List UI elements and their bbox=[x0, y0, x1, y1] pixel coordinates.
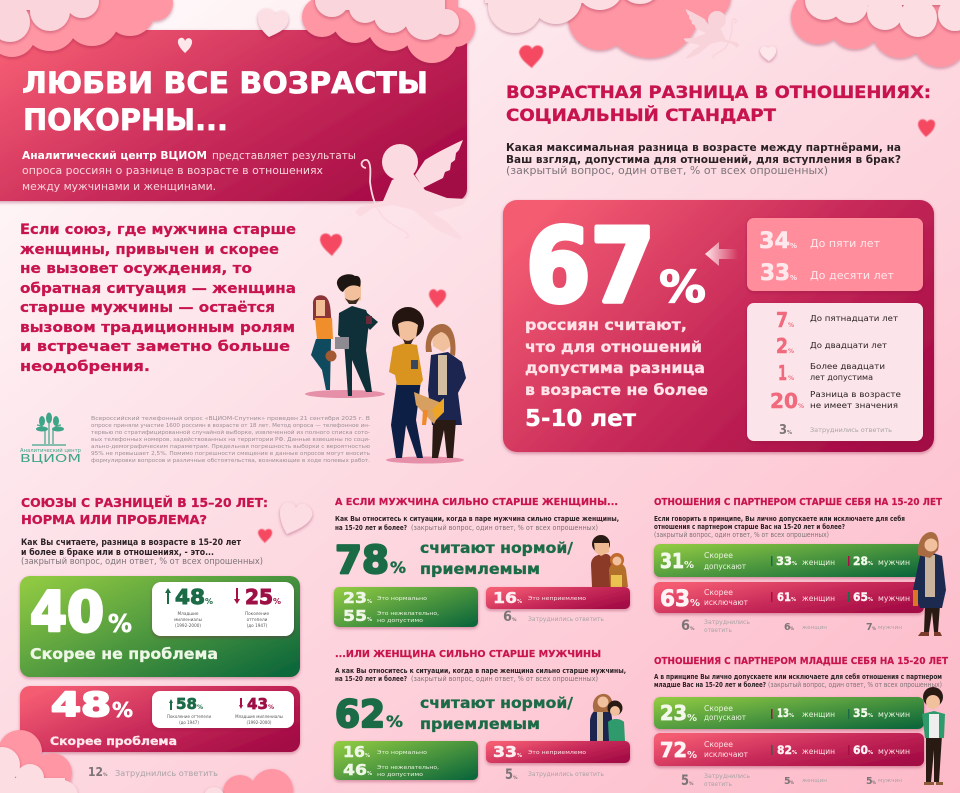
heading: age gap bbox=[506, 83, 931, 125]
panel: acceptable: Это нормально bbox=[377, 596, 428, 602]
illustration: couple bbox=[591, 535, 628, 587]
panel: problem: Скорее проблема bbox=[50, 734, 177, 748]
panel: acceptable: Это нежелательно, bbox=[377, 765, 439, 771]
panel: unacceptable: % bbox=[517, 753, 522, 759]
question bbox=[654, 515, 905, 539]
cloud: top centre bbox=[302, 0, 475, 63]
panel: acceptable: % bbox=[367, 599, 372, 605]
section: woman much older bbox=[334, 649, 630, 783]
box: other answers: лет допустима bbox=[810, 373, 873, 382]
logo: ВЦИОМ bbox=[20, 412, 81, 465]
bar: allow: % bbox=[789, 713, 794, 719]
bar: exclude bbox=[654, 582, 924, 613]
bar: allow: допускают bbox=[704, 562, 747, 571]
panel: acceptable: % bbox=[367, 617, 372, 623]
bar: exclude: % bbox=[868, 750, 873, 756]
row: unsure: 6 bbox=[681, 618, 690, 634]
heading: unions: СОЮЗЫ С РАЗНИЦЕЙ В 15–20 ЛЕТ: bbox=[21, 495, 268, 510]
question: Как Вы относитесь к ситуации, когда в паре мужчина сильно старше женщины, bbox=[335, 515, 619, 523]
panel: acceptable: но допустимо bbox=[377, 618, 424, 624]
callout: generations: % bbox=[197, 704, 203, 711]
big number 62: % bbox=[386, 712, 403, 731]
intro text bbox=[22, 149, 356, 193]
callout: generations: 48 bbox=[175, 585, 205, 609]
row: unsure: 6 bbox=[784, 622, 791, 633]
row: unsure: % bbox=[690, 626, 695, 632]
answer: unsure: 6 bbox=[503, 609, 512, 625]
statement: считают нормой/ bbox=[420, 694, 574, 712]
heart: red right bbox=[918, 119, 935, 137]
question: Если говорить в принципе, Вы лично допускаете или исключаете для себя bbox=[654, 515, 905, 523]
footnote text: тервью по стратифицированной случайной выборке, извлеченной из полного списка сото- bbox=[91, 429, 370, 436]
cloud: bottom left bbox=[0, 730, 72, 793]
cloud: far right bbox=[791, 0, 960, 67]
panel: not a problem bbox=[20, 576, 300, 677]
panel: problem: % bbox=[112, 698, 133, 722]
box: five and ten years: % bbox=[790, 242, 797, 250]
box: other answers: % bbox=[787, 430, 792, 436]
panel statement: что для отношений bbox=[525, 338, 702, 356]
statement text: неодобрения. bbox=[20, 359, 150, 375]
question: unions: и более в браке или в отношениях, - это... bbox=[21, 547, 214, 558]
heart: small white bbox=[178, 38, 192, 53]
row: unsure: % bbox=[689, 781, 694, 787]
statement bbox=[420, 694, 574, 733]
bar: exclude: 61 bbox=[777, 590, 791, 604]
bar: allow: женщин bbox=[802, 558, 835, 567]
illustration: woman bbox=[913, 532, 946, 636]
box: other answers: 1 bbox=[778, 361, 787, 385]
arrow bbox=[705, 242, 738, 266]
bar: allow: мужчин bbox=[878, 710, 910, 719]
panel: acceptable: 23 bbox=[343, 589, 367, 607]
box: other answers: % bbox=[788, 348, 794, 355]
bar: allow: 35 bbox=[853, 706, 868, 720]
statement text: женщины, привычен и скорее bbox=[20, 242, 279, 258]
bar: exclude: 72 bbox=[660, 738, 687, 762]
bar: exclude: % bbox=[690, 598, 700, 609]
row: unsure: % bbox=[872, 626, 876, 631]
intro text: представляет результаты bbox=[212, 149, 356, 162]
callout: generations: Младшие bbox=[178, 611, 199, 616]
answer: unsure 12: Затруднились ответить bbox=[115, 769, 218, 778]
row: unsure: 7 bbox=[866, 622, 873, 633]
box: other answers: 3 bbox=[779, 423, 787, 438]
illustration: first couple bbox=[305, 274, 385, 398]
box: other answers: До пятнадцати лет bbox=[810, 314, 898, 323]
question bbox=[654, 673, 942, 689]
bar: exclude bbox=[654, 733, 924, 766]
heart: pale top bbox=[258, 9, 288, 37]
illustration: second couple bbox=[386, 307, 466, 464]
box: five and ten years bbox=[747, 218, 923, 291]
answer: unsure: Затруднились ответить bbox=[528, 616, 604, 623]
bar: allow: % bbox=[687, 713, 697, 724]
question: (закрытый вопрос, один ответ, % от всех опрошенных) bbox=[411, 675, 598, 683]
bar: allow: 28 bbox=[853, 554, 868, 568]
intro text: Аналитический центр ВЦИОМ bbox=[22, 149, 207, 162]
panel: problem: 48 bbox=[51, 685, 111, 724]
row: unsure: мужчин bbox=[878, 625, 902, 631]
panel: unacceptable: 33 bbox=[493, 743, 517, 761]
cloud: bottom middle pale bbox=[204, 787, 224, 793]
cloud: top left pale bbox=[0, 0, 99, 42]
callout: generations: 58 bbox=[176, 695, 197, 713]
callout: generations: оттепели bbox=[247, 617, 268, 622]
bar: exclude: 65 bbox=[853, 590, 868, 604]
row: unsure bbox=[681, 618, 902, 634]
bar: allow: мужчин bbox=[878, 558, 910, 567]
box: other answers: % bbox=[788, 322, 794, 329]
callout: generations: % bbox=[205, 597, 213, 606]
intro text: опроса россиян о разнице в возрасте в отношениях bbox=[22, 164, 323, 177]
callout: generations: (до 1947) bbox=[179, 720, 199, 725]
box: other answers bbox=[747, 303, 923, 441]
box: five and ten years: 34 bbox=[759, 229, 790, 254]
statement text: не вызовет осуждения, то bbox=[20, 261, 252, 277]
title bbox=[22, 66, 428, 137]
heart: red near people bbox=[320, 234, 342, 256]
bar: allow: % bbox=[868, 561, 873, 567]
heading: unions bbox=[21, 495, 268, 527]
cloud: top left bbox=[0, 0, 173, 57]
bar: exclude: Скорее bbox=[704, 588, 733, 597]
question: unions bbox=[21, 538, 263, 567]
question bbox=[335, 667, 626, 683]
big number 62: 62 bbox=[335, 693, 385, 736]
bar: allow: Скорее bbox=[704, 704, 733, 713]
question: А как Вы относитесь к ситуации, когда в паре женщина сильно старше мужчины, bbox=[335, 667, 626, 675]
heart: large pale lower left bbox=[280, 502, 312, 534]
box: other answers: не имеет значения bbox=[810, 401, 898, 410]
logo: ВЦИОМ: Аналитический центр bbox=[20, 447, 81, 454]
bar: exclude: женщин bbox=[802, 747, 835, 756]
panel: acceptable: 55 bbox=[343, 607, 367, 625]
percent sign: % bbox=[659, 262, 706, 313]
bar: exclude: % bbox=[791, 597, 796, 603]
row: unsure: Затруднились bbox=[704, 772, 750, 780]
callout: generations bbox=[152, 582, 294, 636]
statement text: и встречает заметно больше bbox=[20, 339, 290, 355]
bar: allow: допускают bbox=[704, 713, 747, 722]
bar: allow: женщин bbox=[802, 710, 835, 719]
answer: unsure 12 bbox=[88, 765, 218, 779]
cupid: on banner bbox=[355, 140, 467, 240]
heading: age gap: СОЦИАЛЬНЫЙ СТАНДАРТ bbox=[506, 106, 777, 125]
question: age gap: Какая максимальная разница в возрасте между партнёрами, на bbox=[506, 142, 901, 154]
intro text: между мужчинами и женщинами. bbox=[22, 180, 216, 193]
row: unsure bbox=[681, 772, 902, 789]
callout: generations: % bbox=[273, 597, 281, 606]
row: unsure: Затруднились bbox=[704, 618, 750, 626]
panel: acceptable: % bbox=[367, 771, 372, 777]
question: age gap: Ваш взгляд, допустима для отношений, для вступления в брак? bbox=[506, 154, 901, 166]
answer: unsure: % bbox=[513, 775, 518, 781]
box: other answers: 2 bbox=[776, 334, 788, 358]
illustration: couple bbox=[590, 694, 625, 741]
box: other answers: % bbox=[788, 375, 794, 382]
bar: allow: 31 bbox=[660, 549, 684, 573]
panel: unacceptable: Это неприемлемо bbox=[528, 596, 587, 602]
question: (закрытый вопрос, один ответ, % от всех опрошенных) bbox=[411, 524, 598, 532]
callout: generations: Поколение оттепели bbox=[167, 714, 211, 719]
bar: allow: Скорее bbox=[704, 551, 733, 560]
panel statement: 5-10 лет bbox=[525, 406, 637, 432]
cloud: top middle pale bbox=[485, 0, 662, 33]
question: unions: Как Вы считаете, разница в возрасте в 15-20 лет bbox=[21, 538, 241, 548]
bar: allow: % bbox=[792, 561, 797, 567]
panel statement: в возрасте не более bbox=[525, 381, 708, 399]
callout: generations: Младшие миллениалы bbox=[235, 714, 283, 719]
question: отношения с партнером старше Вас на 15-20 лет и более? bbox=[654, 523, 845, 531]
box: other answers: 7 bbox=[776, 308, 788, 332]
panel statement bbox=[525, 316, 708, 432]
panel: acceptable bbox=[334, 587, 478, 627]
box: other answers: Затруднились ответить bbox=[810, 427, 892, 434]
bar: allow: % bbox=[868, 713, 873, 719]
panel: not a problem: Скорее не проблема bbox=[30, 645, 218, 663]
footnote text bbox=[91, 415, 371, 464]
callout: generations: Поколение bbox=[245, 611, 269, 616]
box: five and ten years: % bbox=[790, 274, 797, 282]
bar: exclude: 60 bbox=[853, 743, 868, 757]
bar: exclude: мужчин bbox=[878, 594, 910, 603]
heading: А ЕСЛИ МУЖЧИНА СИЛЬНО СТАРШЕ ЖЕНЩИНЫ... bbox=[335, 497, 618, 508]
answer: unsure bbox=[503, 609, 604, 625]
box: five and ten years: До десяти лет bbox=[810, 270, 894, 282]
answer: unsure bbox=[505, 767, 604, 783]
footnote text: формулировки вопросов и различные обстоятельства, возникающие в ходе полевых работ. bbox=[91, 458, 370, 464]
title: ПОКОРНЫ... bbox=[23, 103, 228, 137]
question: на 15-20 лет и более? bbox=[335, 524, 407, 532]
bar: allow bbox=[654, 544, 924, 577]
panel: not a problem: % bbox=[108, 609, 132, 638]
heading: ...ИЛИ ЖЕНЩИНА СИЛЬНО СТАРШЕ МУЖЧИНЫ bbox=[335, 649, 601, 660]
row: unsure: женщин bbox=[802, 625, 827, 631]
panel: unacceptable bbox=[486, 741, 630, 763]
panel: unacceptable: % bbox=[517, 599, 522, 605]
answer: unsure 12: 12 bbox=[88, 765, 103, 779]
panel: title banner bbox=[0, 30, 467, 201]
panel: acceptable bbox=[334, 741, 478, 780]
callout: generations: 25 bbox=[245, 585, 273, 609]
heading: ОТНОШЕНИЯ С ПАРТНЕРОМ СТАРШЕ СЕБЯ НА 15-20 ЛЕТ bbox=[654, 497, 942, 508]
bar: exclude: исключают bbox=[704, 750, 749, 759]
cloud: top right pink middle bbox=[568, 0, 731, 58]
icon: tree bbox=[32, 412, 66, 445]
callout: generations: 43 bbox=[247, 695, 268, 713]
answer: unsure: % bbox=[512, 617, 517, 623]
statement text: обратная ситуация — женщина bbox=[20, 281, 296, 297]
bar: exclude: Скорее bbox=[704, 740, 733, 749]
footnote text: вых телефонных номеров, задействованных на территории РФ. Данные взвешены по соци- bbox=[91, 436, 370, 443]
heart: pale small top right bbox=[760, 46, 776, 61]
row: unsure: 5 bbox=[784, 776, 791, 787]
heart: small red lower left bbox=[258, 529, 272, 543]
question: unions: (закрытый вопрос, один ответ, % от всех опрошенных) bbox=[21, 557, 263, 567]
big number 67: 67 bbox=[526, 207, 655, 326]
panel: acceptable: 16 bbox=[343, 743, 365, 761]
statement: приемлемым bbox=[420, 715, 540, 733]
box: other answers: Более двадцати bbox=[810, 362, 885, 371]
panel: acceptable: но допустимо bbox=[377, 772, 424, 778]
callout: generations bbox=[152, 691, 294, 728]
title: ЛЮБВИ ВСЕ ВОЗРАСТЫ bbox=[22, 66, 428, 100]
bar: allow: % bbox=[684, 560, 694, 571]
section: partner older bbox=[654, 497, 946, 636]
row: unsure: ответить bbox=[704, 780, 732, 788]
answer: unsure: 5 bbox=[505, 767, 513, 783]
big number 78: 78 bbox=[335, 538, 389, 582]
footnote text: Всероссийский телефонный опрос «ВЦИОМ-Спутник» проведен 21 сентября 2025 г. В bbox=[91, 415, 371, 422]
section: partner younger bbox=[654, 656, 948, 789]
bar: exclude: мужчин bbox=[878, 747, 910, 756]
callout: generations: (1992-2000) bbox=[247, 720, 272, 725]
question: (закрытый вопрос, один ответ, % от всех опрошенных) bbox=[654, 531, 829, 539]
heart: red small near people bbox=[429, 289, 446, 308]
bar: exclude: 82 bbox=[777, 743, 792, 757]
question: на 15-20 лет и более? bbox=[335, 675, 407, 683]
row: unsure: мужчин bbox=[878, 778, 902, 784]
question: age gap bbox=[506, 142, 901, 177]
big number 78: % bbox=[390, 558, 406, 577]
question: age gap: (закрытый вопрос, один ответ, % от всех опрошенных) bbox=[506, 165, 828, 177]
callout: generations: (до 1947) bbox=[247, 623, 268, 628]
panel: acceptable: 46 bbox=[343, 761, 367, 779]
box: other answers: Разница в возрасте bbox=[810, 390, 901, 399]
row: unsure: 5 bbox=[681, 773, 689, 789]
statement: приемлемым bbox=[420, 560, 540, 578]
footnote text: опросе приняли участие 1600 россиян в возрасте от 18 лет. Метод опроса — телефонное ин- bbox=[91, 423, 370, 429]
logo: ВЦИОМ: ВЦИОМ bbox=[20, 452, 81, 465]
bar: exclude: исключают bbox=[704, 598, 749, 607]
footnote text: ально-демографическим параметрам. Предельная погрешность выборки с вероятностью bbox=[91, 444, 370, 450]
bar: exclude: 63 bbox=[660, 587, 690, 612]
statement text: Если союз, где мужчина старше bbox=[20, 222, 296, 238]
bar: allow: 13 bbox=[777, 706, 789, 720]
cloud: bottom middle bbox=[223, 769, 293, 793]
panel statement: россиян считают, bbox=[525, 316, 687, 334]
cupid: top right bbox=[684, 9, 740, 59]
callout: generations: % bbox=[268, 704, 274, 711]
box: other answers: До двадцати лет bbox=[810, 341, 887, 350]
panel: unacceptable: Это неприемлемо bbox=[528, 750, 587, 756]
statement text bbox=[20, 222, 296, 375]
row: unsure: ответить bbox=[704, 626, 732, 634]
box: other answers: % bbox=[798, 403, 804, 410]
panel: unacceptable bbox=[486, 587, 630, 609]
question: младше Вас на 15-20 лет и более? bbox=[654, 681, 766, 689]
panel: acceptable: % bbox=[365, 753, 370, 759]
row: unsure: % bbox=[790, 780, 794, 785]
bar: exclude: % bbox=[687, 750, 697, 761]
row: unsure: женщин bbox=[802, 778, 827, 784]
cloud: top centre pale bbox=[315, 0, 459, 40]
section: man much older bbox=[334, 497, 630, 627]
answer: unsure 12: % bbox=[103, 772, 108, 778]
panel: problem bbox=[20, 685, 300, 752]
row: unsure: % bbox=[790, 626, 794, 631]
bar: allow: 23 bbox=[660, 701, 687, 725]
statement: считают нормой/ bbox=[420, 539, 574, 557]
box: five and ten years: 33 bbox=[760, 261, 790, 286]
footnote text: 95% не превышает 2,5%. Помимо погрешности смещение в данные опросов могут вносить bbox=[91, 451, 370, 457]
box: five and ten years: До пяти лет bbox=[810, 238, 880, 250]
bar: exclude: % bbox=[792, 750, 797, 756]
bar: allow: 33 bbox=[776, 554, 792, 568]
bar: exclude: % bbox=[868, 597, 873, 603]
illustration: man bbox=[922, 687, 945, 785]
statement text: вызовом традиционным ролям bbox=[20, 320, 295, 336]
callout: generations: миллениалы bbox=[174, 617, 202, 622]
bar: exclude: женщин bbox=[802, 594, 835, 603]
cloud: far right pale bbox=[805, 0, 960, 37]
row: unsure: % bbox=[872, 780, 876, 785]
panel: unacceptable: 16 bbox=[493, 589, 517, 607]
statement bbox=[420, 539, 574, 578]
statement text: старше мужчины — остаётся bbox=[20, 300, 275, 316]
question bbox=[335, 515, 619, 532]
panel statement: допустима разница bbox=[525, 359, 705, 377]
panel: acceptable: Это нормально bbox=[377, 750, 428, 756]
heading: age gap: ВОЗРАСТНАЯ РАЗНИЦА В ОТНОШЕНИЯХ: bbox=[506, 83, 931, 102]
box: other answers: 20 bbox=[770, 389, 798, 413]
panel: 67 percent bbox=[503, 200, 934, 452]
answer: unsure: Затруднились ответить bbox=[528, 771, 604, 778]
callout: generations: (1992-2000) bbox=[175, 623, 201, 628]
row: unsure: 5 bbox=[866, 776, 873, 787]
panel: acceptable: Это нежелательно, bbox=[377, 611, 439, 617]
cloud: bottom left pale bbox=[0, 747, 78, 793]
heading: unions: НОРМА ИЛИ ПРОБЛЕМА? bbox=[21, 512, 207, 527]
panel: not a problem: 40 bbox=[30, 580, 104, 644]
bar: allow bbox=[654, 697, 924, 729]
heart: red top bbox=[519, 45, 543, 68]
